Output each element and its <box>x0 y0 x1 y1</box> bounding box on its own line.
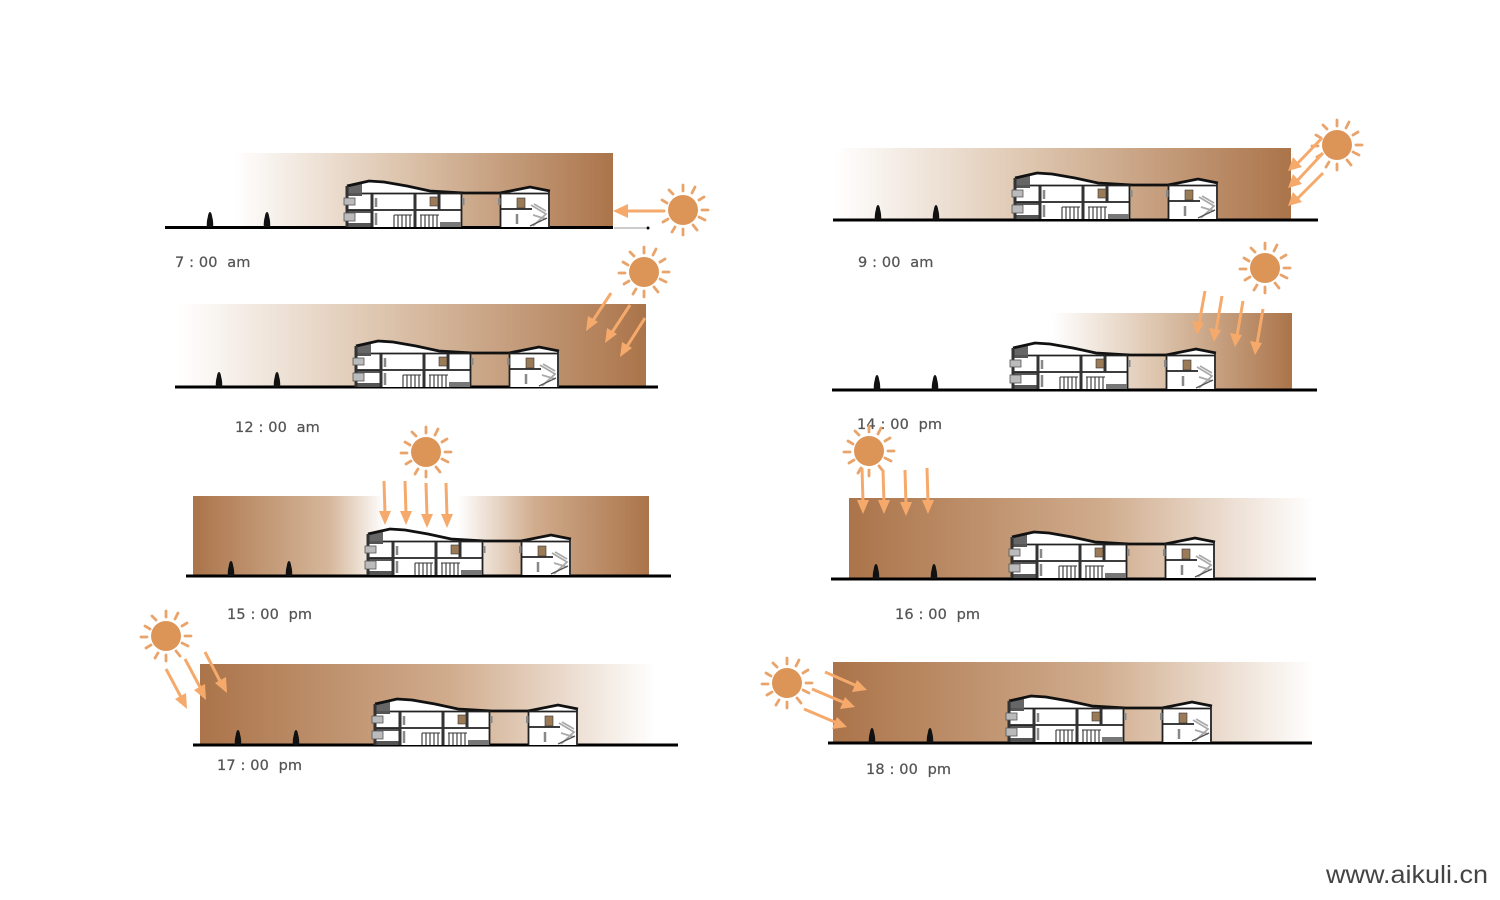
watermark: www.aikuli.cn <box>1325 861 1488 889</box>
ground line <box>831 578 1316 580</box>
icon: sun <box>619 247 669 297</box>
arrows: sun rays <box>586 293 645 357</box>
icon: sun <box>762 658 812 708</box>
arrows: sun rays <box>166 652 227 709</box>
time label: 12 : 00 am <box>235 420 320 436</box>
shadow gradient <box>234 153 613 227</box>
trees <box>873 564 937 579</box>
trees <box>869 728 933 743</box>
icon: sun <box>658 185 708 235</box>
building section <box>353 341 559 387</box>
shadow gradient <box>193 496 649 575</box>
panel: 15:00 pm sun study <box>186 427 671 623</box>
time label: 16 : 00 pm <box>895 607 980 623</box>
time label: 7 : 00 am <box>175 255 251 271</box>
icon: sun <box>1312 120 1362 170</box>
building section <box>365 529 571 575</box>
panel: 18:00 pm sun study <box>762 658 1314 778</box>
ground line <box>165 226 650 230</box>
arrows: sun rays <box>857 468 934 516</box>
shadow gradient <box>849 498 1313 579</box>
arrows: sun rays <box>1192 291 1263 355</box>
building section <box>1006 696 1212 742</box>
shadow gradient <box>1052 313 1292 389</box>
time label: 14 : 00 pm <box>857 417 942 433</box>
arrows: sun rays <box>1288 138 1323 206</box>
icon: sun <box>1240 243 1290 293</box>
time label: 17 : 00 pm <box>217 758 302 774</box>
building section <box>344 181 550 227</box>
time label: 18 : 00 pm <box>866 762 951 778</box>
building section <box>1010 343 1216 389</box>
panel: 16:00 pm sun study <box>831 426 1316 623</box>
panel: 17:00 pm sun study <box>141 611 678 774</box>
arrows: sun rays <box>804 672 867 729</box>
trees <box>235 730 299 745</box>
building section <box>1012 173 1218 219</box>
panel: 12:00 am sun study <box>175 247 669 436</box>
ground line <box>833 218 1318 222</box>
trees <box>228 561 292 576</box>
building section <box>1009 532 1215 578</box>
ground line <box>193 744 678 746</box>
ground line <box>828 742 1312 744</box>
trees <box>875 205 939 220</box>
arrow: sun ray <box>613 204 664 218</box>
shadow gradient <box>200 664 655 745</box>
shadow gradient <box>835 148 1291 219</box>
ground line <box>186 574 671 578</box>
trees <box>874 375 938 390</box>
panel: 14:00 pm sun study <box>832 243 1317 433</box>
panel: 7:00 am sun study <box>165 153 708 271</box>
time label: 15 : 00 pm <box>227 607 312 623</box>
trees <box>207 212 270 227</box>
icon: sun <box>141 611 191 661</box>
icon: sun <box>844 426 894 476</box>
trees <box>216 372 280 387</box>
ground line <box>175 386 658 388</box>
time label: 9 : 00 am <box>858 255 934 271</box>
panel: 9:00 am sun study <box>833 120 1362 271</box>
ground line <box>832 388 1317 392</box>
arrows: sun rays <box>379 481 453 528</box>
shadow gradient <box>833 662 1314 743</box>
icon: sun <box>401 427 451 477</box>
building section <box>372 699 578 745</box>
shadow gradient <box>178 304 646 387</box>
